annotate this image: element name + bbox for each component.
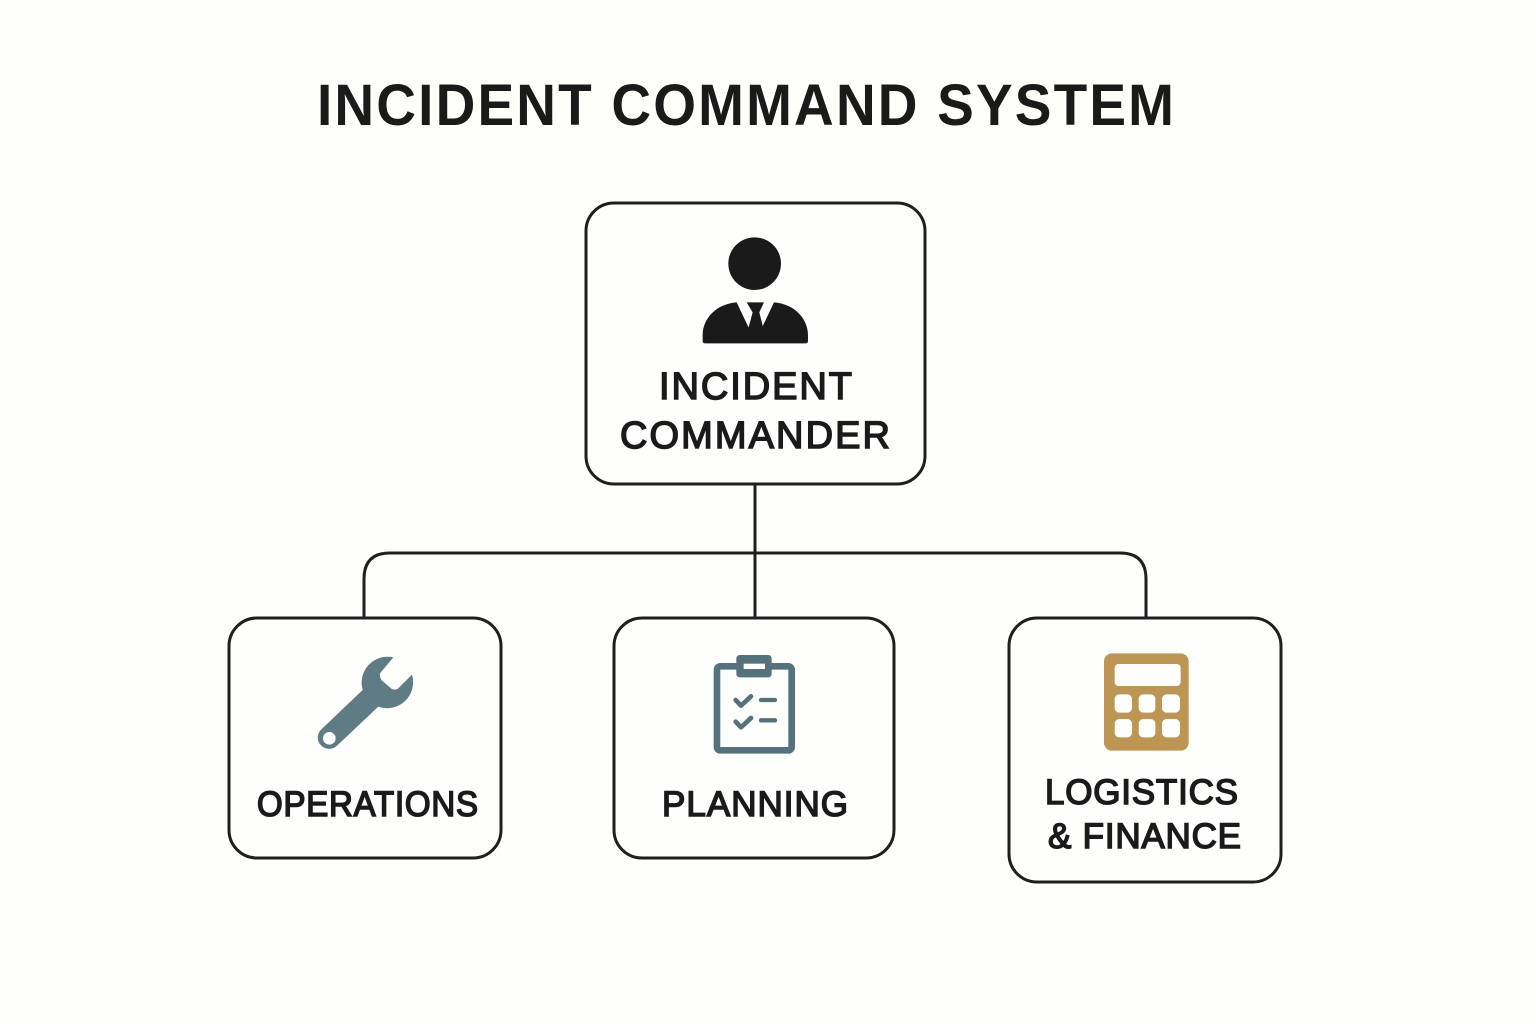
label: logistics and finance: LOGISTICS [1045, 773, 1238, 812]
panel: logistics and finance [1009, 618, 1281, 882]
icon: calculator [1104, 653, 1189, 751]
icon: clipboard [717, 655, 792, 750]
label: logistics and finance: & FINANCE [1048, 817, 1241, 856]
label: incident commander: COMMANDER [620, 415, 890, 457]
panel: incident commander [586, 203, 925, 484]
label: planning: PLANNING [662, 785, 848, 824]
label: incident commander: INCIDENT [659, 366, 852, 408]
panel: planning [614, 618, 894, 858]
icon: wrench [318, 657, 413, 749]
label: logistics and finance [1045, 773, 1241, 856]
panel: operations [229, 618, 501, 858]
icon: person with tie [703, 237, 808, 343]
label: incident commander [620, 366, 890, 457]
label: operations: OPERATIONS [257, 785, 478, 824]
connector lines [364, 484, 1146, 618]
title: INCIDENT COMMAND SYSTEM [317, 73, 1174, 137]
